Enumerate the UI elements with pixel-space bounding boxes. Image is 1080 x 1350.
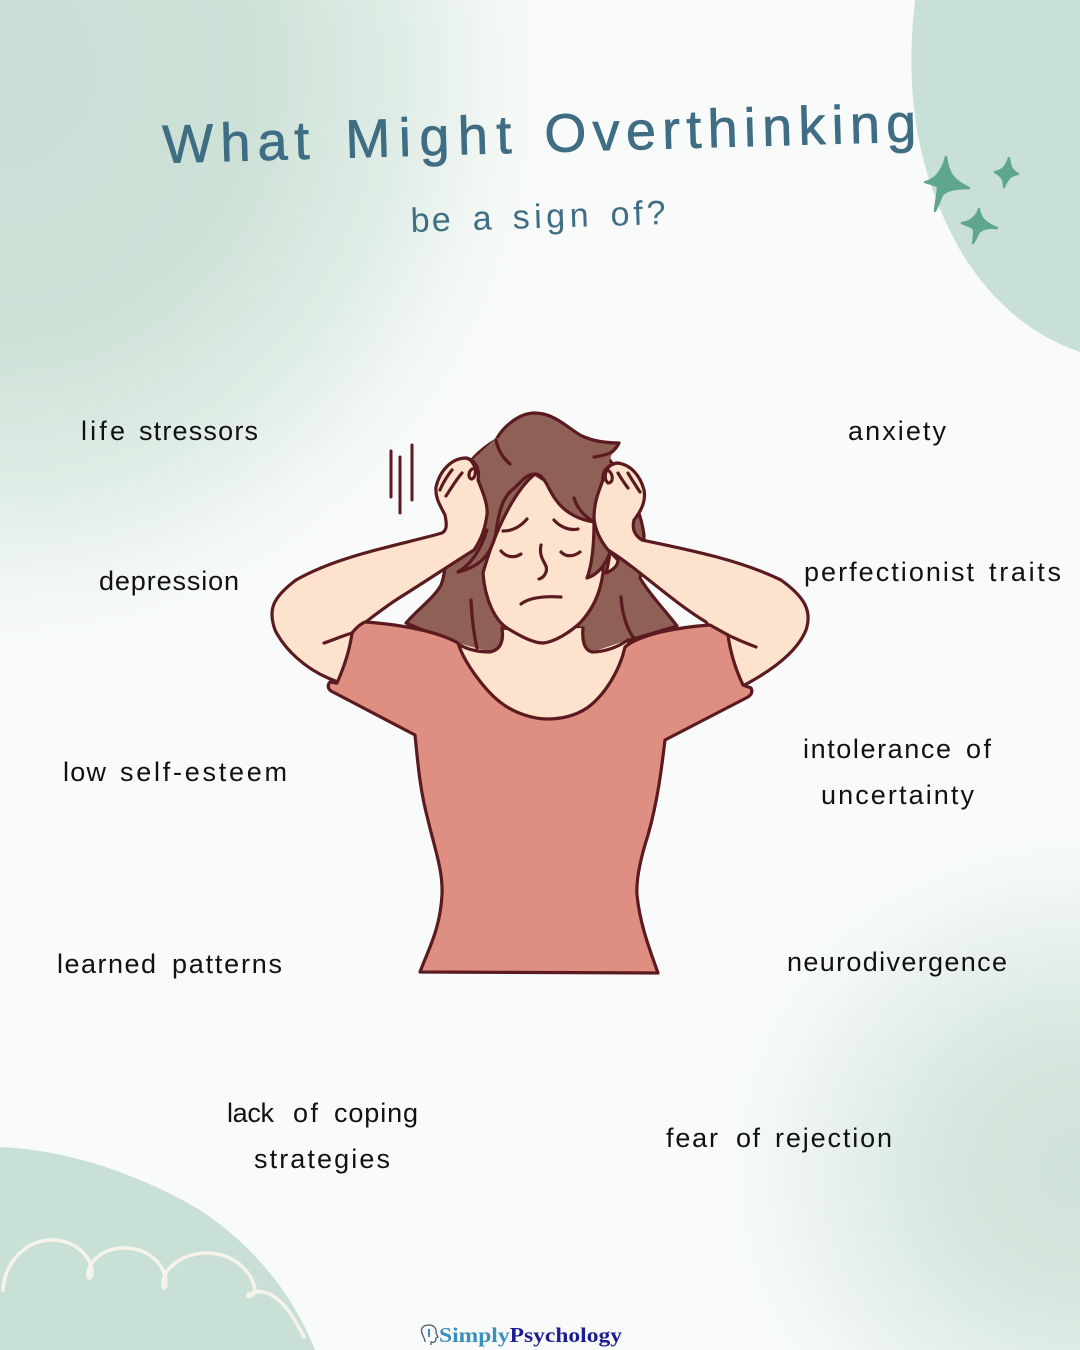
label: life stressors: life — [81, 416, 125, 446]
label: lack of coping strategies: coping — [334, 1098, 418, 1128]
stress motion lines — [391, 445, 412, 513]
label: lack of coping strategies: of — [293, 1098, 318, 1128]
subtitle: sign — [512, 196, 589, 237]
soft green wash, top left — [0, 0, 560, 660]
labels: left column — [57, 416, 287, 979]
hair fringe edges — [458, 440, 633, 648]
label: learned patterns: learned — [57, 949, 156, 979]
hands: finger details — [440, 458, 640, 496]
label: perfectionist traits: perfectionist — [804, 557, 974, 587]
title: What — [162, 111, 310, 175]
face with chin line — [483, 474, 603, 643]
label: fear of rejection: fear — [666, 1123, 718, 1153]
title: Overthinking — [543, 93, 917, 164]
title: Might — [345, 105, 512, 170]
label: low self-esteem: self-esteem — [120, 757, 287, 787]
label: perfectionist traits: traits — [989, 557, 1061, 587]
hair behind head — [406, 413, 677, 652]
neck edges of hair locks — [458, 628, 628, 652]
right hair lock beside cheek — [587, 522, 610, 578]
subtitle: be — [410, 201, 451, 240]
wordmark: Simply Psychology — [439, 1323, 623, 1347]
left arm and hand — [272, 458, 487, 685]
label: intolerance of uncertainty: of — [966, 734, 991, 764]
labels: right column — [787, 416, 1061, 977]
shirt — [328, 622, 752, 973]
label: life stressors: stressors — [139, 416, 258, 446]
corner blob, top right — [911, 0, 1080, 352]
subtitle: a — [472, 199, 492, 238]
logo: Simply Psychology — [421, 1323, 623, 1347]
label: lack of coping strategies — [227, 1098, 418, 1174]
label: depression: depression — [99, 566, 239, 596]
labels: bottom row — [227, 1098, 892, 1174]
label: lack of coping strategies: strategies — [254, 1144, 390, 1174]
right arm and hand — [594, 463, 808, 690]
label: lack of coping strategies: lack — [227, 1098, 274, 1128]
label: low self-esteem: low — [63, 757, 106, 787]
label: intolerance of uncertainty: uncertainty — [821, 780, 974, 810]
corner blob, bottom left — [0, 1147, 315, 1350]
illustration: stressed woman holding her head — [272, 413, 808, 973]
label: fear of rejection: of — [736, 1123, 760, 1153]
label: fear of rejection: rejection — [775, 1123, 892, 1153]
icon: sparkles — [925, 157, 1018, 243]
ear — [606, 552, 618, 573]
soft green wash, bottom right — [710, 820, 1080, 1350]
label: learned patterns: patterns — [172, 949, 282, 979]
icon: head silhouette — [421, 1325, 438, 1345]
neck — [458, 628, 628, 720]
face details — [501, 519, 580, 604]
hair fringe fill — [458, 438, 612, 572]
label: anxiety: anxiety — [848, 416, 946, 446]
label: intolerance of uncertainty: intolerance — [803, 734, 951, 764]
subtitle: of? — [610, 194, 666, 234]
label: intolerance of uncertainty — [803, 734, 991, 810]
label: neurodivergence: neurodivergence — [787, 947, 1007, 977]
icon: cloud line doodle — [3, 1240, 304, 1337]
arm creases over sleeves — [324, 633, 756, 647]
